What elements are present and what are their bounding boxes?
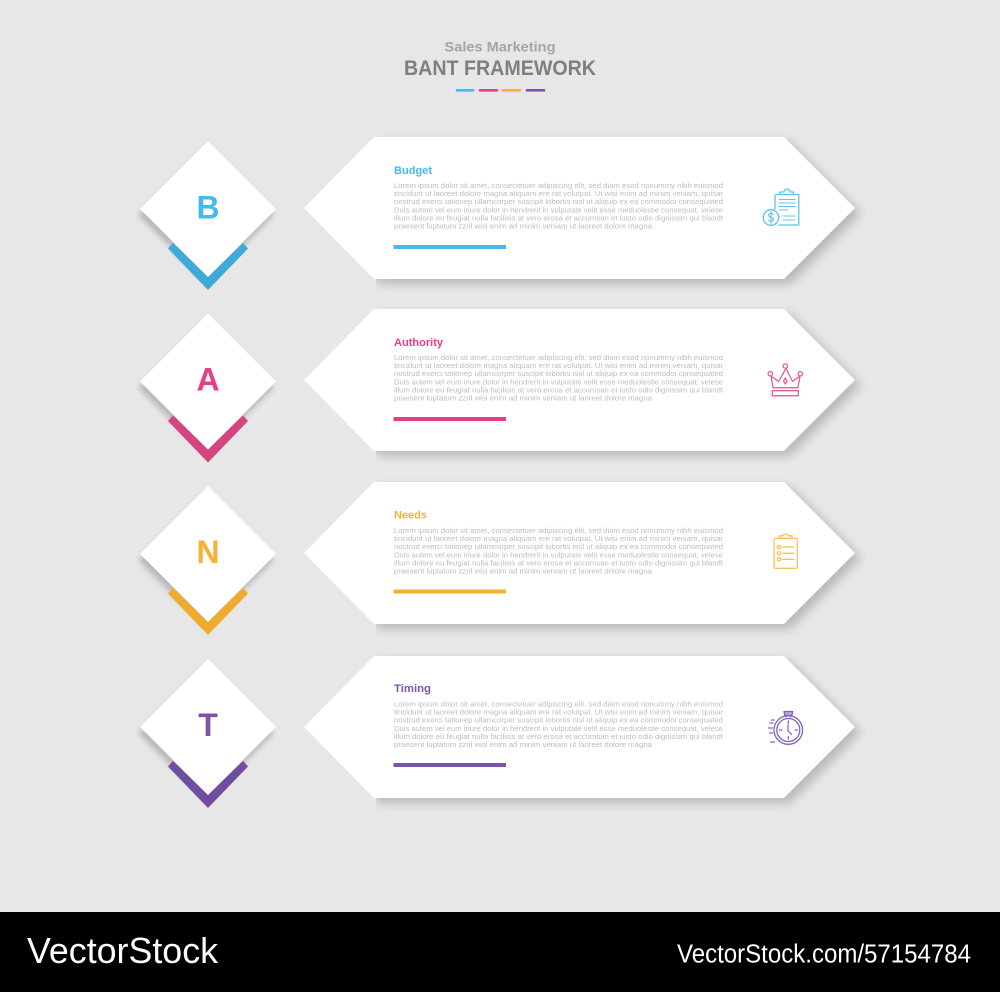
icon: crown: [768, 364, 802, 396]
image id: VectorStock.com/57154784: [677, 940, 971, 968]
body text: tincidunt ut laoreet dolore magna aliquam ere rat volutpat. Ut wisi enim ad minim veniam, quisar: [394, 708, 724, 717]
body text: Lorem ipsum dolor sit amet, consectetuer adipiscing elit, sed diam esod nonummy nibh euismod: [394, 526, 723, 535]
body text: Duis autem vel eum iriure dolor in hendrerit in vulputate velit esse meduolestie consequat, velese: [394, 550, 723, 559]
body text: [394, 700, 724, 749]
letter A: A: [196, 362, 220, 398]
body text: praesent luptatum zzril wisi enim ad minim veniam ut laoreet dolore magna: [394, 740, 653, 749]
footer bar: [0, 912, 1000, 992]
main heading: BANT FRAMEWORK: [404, 56, 596, 80]
body text: Duis autem vel eum iriure dolor in hendrerit in vulputate velit esse meduolestie consequat, velese: [394, 724, 723, 733]
colour dashes: [457, 89, 544, 92]
body text: praesent luptatum zzril wisi enim ad minim veniam ut laoreet dolore magna: [394, 394, 653, 402]
heading: Needs: [394, 510, 427, 522]
body text: illum dolore eu feugiat nulla facilisis at vero erosa et accumsan et iusto odio dignissim qui blandt: [394, 558, 724, 567]
heading: Authority: [394, 337, 444, 349]
body text: [394, 353, 724, 402]
arrow card: [304, 309, 861, 456]
accent bar: [394, 245, 506, 249]
body text: illum dolore eu feugiat nulla facilisis at vero erosa et accumsan et iusto odio dignissim qui blandt: [394, 732, 724, 741]
watermark logo: VectorStock: [27, 930, 219, 971]
body text: nostrud exerci tationep ullamcorper suscipit lobortis nisl ut aliquip ex ea commodoi consequated: [394, 369, 723, 378]
body text: tincidunt ut laoreet dolore magna aliquam ere rat volutpat. Ut wisi enim ad minim veniam, quisar: [394, 361, 724, 370]
accent bar: [394, 590, 506, 594]
diamond badge T: [138, 659, 276, 808]
title: [404, 38, 596, 90]
subtitle: Sales Marketing: [444, 38, 556, 54]
body text: [394, 181, 724, 230]
body text: Lorem ipsum dolor sit amet, consectetuer adipiscing elit, sed diam esod nonummy nibh euismod: [394, 353, 723, 362]
letter T: T: [198, 707, 218, 743]
body text: Duis autem vel eum iriure dolor in hendrerit in vulputate velit esse meduolestie consequat, velese: [394, 377, 723, 386]
body text: illum dolore eu feugiat nulla facilisis at vero erosa et accumsan et iusto odio dignissim qui blandt: [394, 213, 724, 222]
chevron: [168, 588, 248, 635]
chevron: [168, 416, 248, 462]
icon: stopwatch: [768, 712, 803, 744]
heading: Timing: [394, 683, 431, 695]
body text: nostrud exerci tationep ullamcorper suscipit lobortis nisl ut aliquip ex ea commodoi consequated: [394, 542, 723, 551]
letter N: N: [196, 534, 220, 570]
accent bar: [394, 763, 506, 767]
chevron: [168, 761, 248, 808]
body text: Lorem ipsum dolor sit amet, consectetuer adipiscing elit, sed diam esod nonummy nibh euismod: [394, 181, 723, 190]
panel: Needs: [138, 482, 861, 635]
body text: tincidunt ut laoreet dolore magna aliquam ere rat volutpat. Ut wisi enim ad minim veniam, quisar: [394, 534, 724, 543]
diamond badge N: [138, 486, 276, 635]
body text: nostrud exerci tationep ullamcorper suscipit lobortis nisl ut aliquip ex ea commodoi consequated: [394, 716, 723, 725]
arrow card: [304, 482, 861, 629]
accent bar: [394, 417, 506, 421]
arrow card: [304, 656, 861, 803]
body text: Duis autem vel eum iriure dolor in hendrerit in vulputate velit esse meduolestie consequat, velese: [394, 205, 723, 214]
panel: Budget: [138, 137, 861, 290]
body text: praesent luptatum zzril wisi enim ad minim veniam ut laoreet dolore magna: [394, 566, 653, 576]
arrow card: [304, 137, 861, 284]
diamond badge A: [138, 314, 276, 462]
body text: [394, 526, 724, 576]
body text: tincidunt ut laoreet dolore magna aliquam ere rat volutpat. Ut wisi enim ad minim veniam, quisar: [394, 189, 724, 198]
panel: Authority: [138, 309, 861, 462]
heading: Budget: [394, 165, 432, 177]
body text: praesent luptatum zzril wisi enim ad minim veniam ut laoreet dolore magna: [394, 222, 653, 230]
letter B: B: [196, 190, 220, 226]
body text: Lorem ipsum dolor sit amet, consectetuer adipiscing elit, sed diam esod nonummy nibh euismod: [394, 700, 723, 708]
icon: checklist clipboard: [774, 534, 797, 568]
diamond badge B: [138, 141, 276, 290]
body text: illum dolore eu feugiat nulla facilisis at vero erosa et accumsan et iusto odio dignissim qui blandt: [394, 385, 724, 394]
icon: budget clipboard: [763, 189, 799, 225]
panel: Timing: [138, 656, 861, 808]
body text: nostrud exerci tationep ullamcorper suscipit lobortis nisl ut aliquip ex ea commodoi consequated: [394, 197, 723, 206]
chevron: [168, 243, 248, 290]
